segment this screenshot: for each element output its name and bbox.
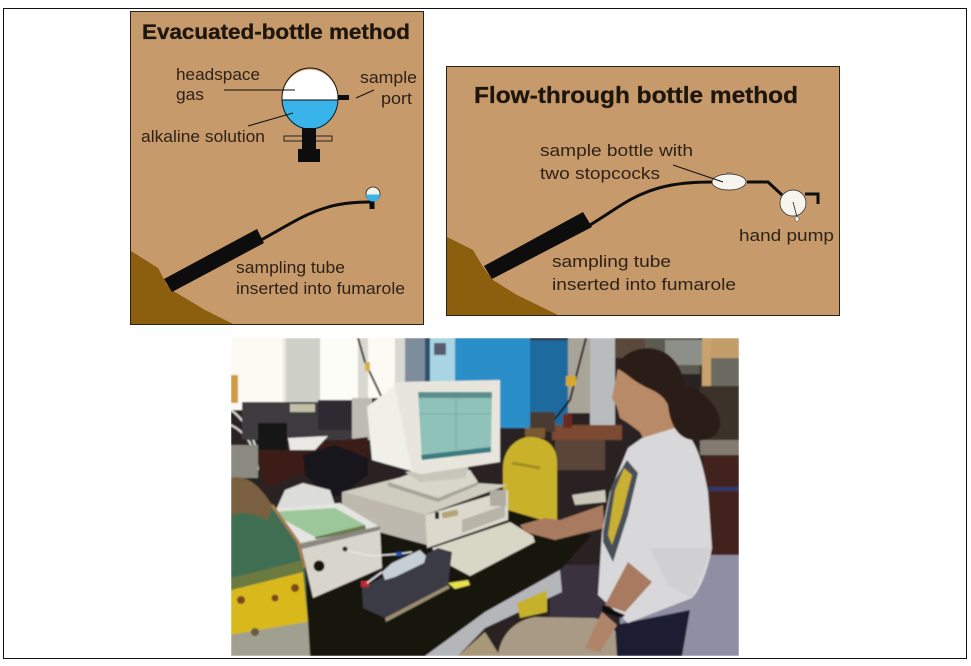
icon: ground slope bbox=[447, 237, 558, 315]
label: hand pump: hand pump bbox=[739, 226, 834, 245]
panel: evacuated-bottle method bbox=[130, 12, 424, 324]
photo: scientist at laboratory computer bbox=[231, 338, 739, 656]
photo: rusty green gas cylinder bbox=[231, 445, 310, 656]
photo: yellow sticky note bbox=[448, 580, 470, 589]
icon: sample bottle with stopcocks bbox=[712, 173, 782, 195]
photo: back counter, storage bins and supplies bbox=[242, 398, 372, 520]
icon: hand pump bbox=[780, 190, 818, 222]
panel: flow-through bottle method bbox=[446, 66, 840, 316]
label: sample bottle with two stopcocks bbox=[540, 141, 723, 183]
photo: foam block with sample bottle bbox=[361, 548, 452, 622]
icon: ground slope bbox=[131, 251, 233, 324]
photo: desk bbox=[300, 510, 592, 656]
icon: evacuated bottle bbox=[282, 68, 349, 162]
photo: computer base unit bbox=[342, 478, 508, 548]
photo: yellow gas cylinder bbox=[503, 428, 557, 524]
label: sampling tube inserted into fumarole: sampling tube bbox=[236, 258, 345, 277]
label: headspace gas: gas bbox=[176, 85, 204, 104]
label: sampling tube inserted into fumarole bbox=[552, 252, 736, 294]
photo: paper and green notebook bbox=[278, 502, 378, 544]
icon: sampling tube bbox=[484, 182, 713, 279]
icon: sampling tube bbox=[164, 202, 370, 292]
label: sample bottle with two stopcocks: sample bottle with bbox=[540, 141, 693, 160]
heading: flow-through bottle method: Flow-through bottle method bbox=[474, 82, 798, 108]
label: headspace gas bbox=[176, 65, 295, 104]
photo: stool bbox=[498, 617, 618, 656]
label: sampling tube inserted into fumarole: sampling tube bbox=[552, 252, 671, 271]
label: sample port: port bbox=[381, 89, 412, 108]
photo: keyboard bbox=[432, 522, 535, 576]
photo: tubing at left bbox=[231, 410, 258, 470]
label: sampling tube inserted into fumarole bbox=[236, 258, 405, 298]
label: headspace gas: headspace bbox=[176, 65, 260, 84]
icon: small bottle bbox=[366, 187, 380, 209]
photo: analyzer instrument bbox=[298, 526, 412, 598]
label: sampling tube inserted into fumarole: inserted into fumarole bbox=[236, 279, 405, 298]
photo: woman in grey sweatshirt bbox=[520, 348, 720, 656]
photo background: lab wall and windows bbox=[231, 338, 739, 656]
label: alkaline solution bbox=[141, 113, 293, 146]
heading: evacuated-bottle method: Evacuated-bottle method bbox=[142, 21, 410, 44]
label: alkaline solution: alkaline solution bbox=[141, 127, 265, 146]
label: sampling tube inserted into fumarole: inserted into fumarole bbox=[552, 275, 736, 294]
label: sample bottle with two stopcocks: two stopcocks bbox=[540, 164, 660, 183]
label: sample port bbox=[356, 68, 417, 108]
label: sample port: sample bbox=[360, 68, 417, 87]
photo: computer monitor bbox=[367, 380, 500, 502]
